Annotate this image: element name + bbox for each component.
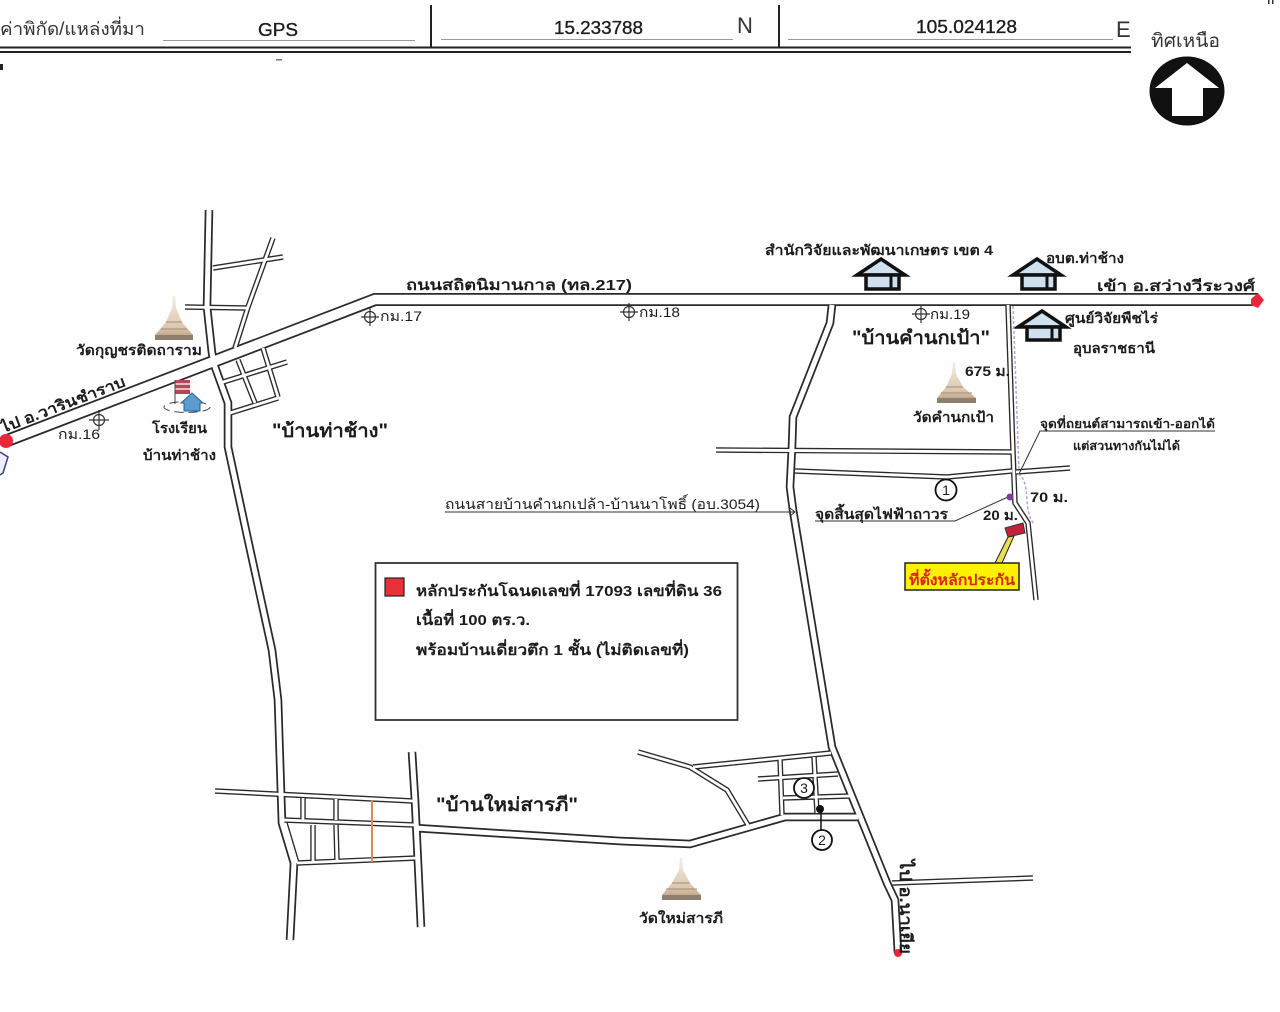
kilometre markers: กม.16 [58, 426, 100, 442]
temple: Wat Mai Saraphi: วัดใหม่สารภี [639, 909, 723, 926]
temple: Wat Kham Nok Pao: วัดคำนกเป้า [913, 409, 994, 425]
numbered marker 1 [936, 480, 956, 500]
kilometre markers: กม.19 [930, 306, 970, 322]
dotted electric line [1013, 306, 1034, 524]
numbered marker 1: 1 [942, 482, 950, 498]
building: agricultural research office [765, 242, 993, 289]
school: Ban Tha Chang [143, 380, 216, 463]
temple: Wat Kunchon: วัดกุญชรติดถาราม [76, 342, 202, 359]
village label: Ban Tha Chang: "บ้านท่าช้าง" [272, 420, 388, 442]
callout: end of permanent electricity [815, 494, 1014, 523]
temple: Wat Mai Saraphi [639, 858, 723, 926]
school: Ban Tha Chang: โรงเรียน [151, 419, 207, 436]
collateral lot marker and callout: ที่ตั้งหลักประกัน [909, 568, 1016, 589]
callout: car passing point: จุดที่ถยนต์สามารถเข้า-ออกได้ [1040, 415, 1215, 432]
header: GPS coordinates: 15.233788 [554, 18, 643, 38]
orange lane marker [371, 800, 373, 862]
building: field crops research centre [1018, 309, 1159, 357]
temple: Wat Kunchon [76, 296, 202, 359]
distance: 20 m: 20 ม. [983, 507, 1018, 523]
header: GPS coordinates: 105.024128 [916, 17, 1017, 37]
road network [6, 210, 1258, 953]
direction: to Sawang Wirawong: เข้า อ.สว่างวีระวงศ์ [1097, 277, 1256, 295]
direction: to Warin Chamrap: ไป อ.วารินชำราบ [0, 372, 128, 438]
callout: car passing point [1019, 415, 1215, 474]
kilometre markers: กม.17 [380, 308, 422, 324]
road name: Ubon 3054: ถนนสายบ้านคำนกเปล้า-บ้านนาโพธิ์ (อบ.3054) [445, 494, 760, 512]
building: Tha Chang SAO: อบต.ท่าช้าง [1046, 250, 1124, 266]
header: GPS coordinates: N [737, 13, 753, 38]
road name: Ubon 3054 [445, 494, 795, 516]
icon: off-map fragment [0, 452, 8, 475]
road name: highway 217: ถนนสถิตนิมานกาล (ทล.217) [406, 276, 632, 294]
numbered marker 3: 3 [800, 780, 808, 796]
kilometre markers: กม.18 [639, 304, 680, 320]
village label: Ban Kham Nok Pao: "บ้านคำนกเป้า" [852, 327, 990, 349]
temple: Wat Kham Nok Pao [913, 362, 994, 425]
north label and arrow: ทิศเหนือ [1151, 31, 1220, 52]
legend panel [376, 563, 738, 720]
route end markers [0, 293, 1264, 957]
distance: 70 m: 70 ม. [1030, 489, 1068, 505]
building: field crops research centre: ศูนย์วิจัยพืชไร่ [1065, 309, 1159, 327]
header: GPS coordinates: E [1116, 17, 1131, 42]
header: GPS coordinates: ค่าพิกัด/แหล่งที่มา [0, 16, 145, 39]
building: agricultural research office: สำนักวิจัยและพัฒนาเกษตร เขต 4 [765, 242, 993, 258]
building: Tha Chang SAO [1013, 250, 1124, 289]
header: GPS coordinates: GPS [258, 20, 298, 40]
village label: Ban Mai Saraphi: "บ้านใหม่สารภี" [436, 793, 578, 816]
header: GPS coordinates [0, 0, 1274, 70]
numbered marker 3 [794, 778, 814, 798]
legend panel: หลักประกันโฉนดเลขที่ 17093 เลขที่ดิน 36 [416, 580, 722, 600]
numbered marker 2 [812, 805, 832, 850]
kilometre markers [58, 303, 970, 442]
building: field crops research centre: อุบลราชธานี [1073, 340, 1155, 357]
collateral lot marker and callout [905, 523, 1025, 590]
legend panel: พร้อมบ้านเดี่ยวตึก 1 ชั้น (ไม่ติดเลขที่) [416, 638, 689, 659]
callout: end of permanent electricity: จุดสิ้นสุดไฟฟ้าถาวร [815, 503, 949, 523]
callout: car passing point: แต่สวนทางกันไม่ได้ [1073, 438, 1180, 453]
north label and arrow [1150, 31, 1224, 126]
direction: to Na Yia: ไป อ.นาเยีย [896, 858, 916, 954]
numbered marker 2: 2 [818, 832, 826, 848]
school: Ban Tha Chang: บ้านท่าช้าง [143, 447, 216, 463]
legend panel: เนื้อที่ 100 ตร.ว. [416, 608, 530, 629]
distance: 675 m: 675 ม. [965, 363, 1010, 379]
